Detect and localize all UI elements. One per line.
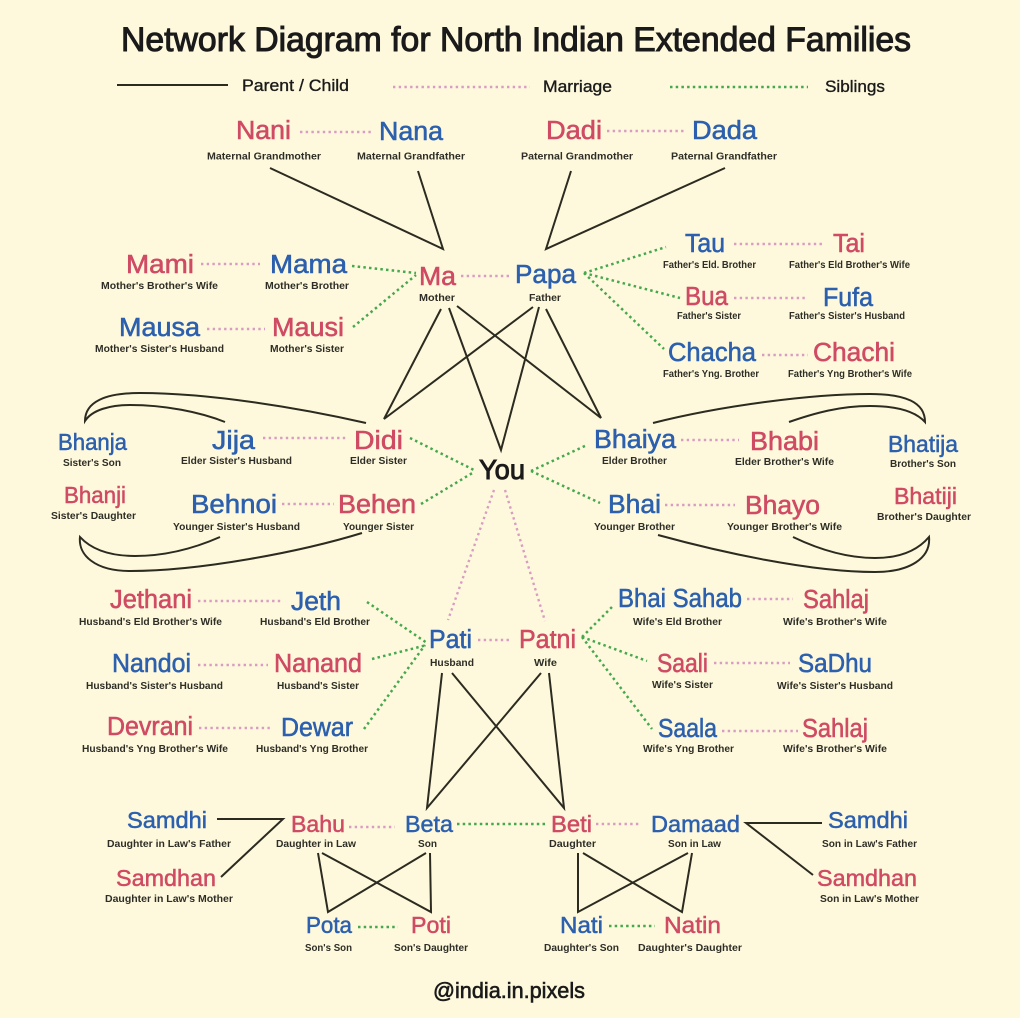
node: Patni [519,626,576,669]
node: Samdhi (left): Samdhi [127,807,207,833]
node: Bhayo: Younger Brother's Wife [727,521,842,533]
legend [117,77,885,96]
node: Sahlaj: Sahlaj [803,586,869,614]
node: Pota: Pota [306,912,352,938]
node: Pati [429,626,474,669]
node: Bhanji [51,482,136,522]
node: Ma: Ma [419,263,457,291]
node: Nandoi: Nandoi [112,650,191,678]
node: Behen: Behen [338,491,416,519]
node: Nanand: Nanand [274,650,362,678]
node: Chacha: Father's Yng. Brother [663,368,759,380]
node: Samdhan (left): Daughter in Law's Mother [105,893,233,905]
node: Bhatiji [877,483,971,523]
node: Papa: Father [529,292,561,304]
node: Samdhi (right): Samdhi [828,807,908,833]
node: Sahlaj (second): Wife's Brother's Wife [783,743,887,755]
node: Beta: Son [418,838,437,850]
node: Saali [652,650,713,691]
node: Bhabi: Bhabi [750,428,819,456]
node: Sahlaj: Wife's Brother's Wife [783,616,887,628]
node: Tau [663,230,756,271]
node: Nani [207,117,321,162]
node: Tai: Tai [833,230,865,258]
node: Chachi [788,339,912,380]
node: Saala [643,715,734,755]
node: Tau: Tau [685,230,725,258]
node: Fufa: Father's Sister's Husband [789,310,905,322]
node: SaDhu: Wife's Sister's Husband [777,680,893,692]
node: Behnoi: Younger Sister's Husband [173,521,300,533]
node: Mausa [95,314,224,355]
node: Bhatiji: Brother's Daughter [877,511,971,523]
node: Mausi: Mother's Sister [270,343,344,355]
node: Samdhan (right): Samdhan [817,865,917,891]
node: Natin: Daughter's Daughter [638,942,742,954]
node: Nati: Daughter's Son [544,942,619,954]
node: Mausa: Mausa [119,314,201,342]
node: Pota [305,912,352,954]
node: Bhaiya: Elder Brother [602,455,667,467]
node: Chacha [663,339,759,380]
node: Devrani [82,713,228,755]
node: Jethani [79,586,222,628]
node: Chachi: Chachi [813,339,895,367]
node: SaDhu: SaDhu [798,650,872,678]
node: Dewar: Dewar [281,714,353,742]
node: Poti [394,912,468,954]
node: Bhanja [58,429,127,469]
node: Devrani: Husband's Yng Brother's Wife [82,743,228,755]
node: Bhai: Bhai [608,491,661,519]
node: Poti: Son's Daughter [394,942,468,954]
node: Nati [544,912,619,954]
node: Bua: Bua [685,283,729,311]
node: Poti: Poti [411,912,451,938]
node: Behen: Younger Sister [343,521,414,533]
node: Jija: Elder Sister's Husband [181,455,292,467]
node: Jeth: Husband's Eld Brother [260,616,370,628]
node: Dada [671,117,777,162]
node: Bhayo: Bhayo [745,492,820,520]
node: Jeth [260,588,370,628]
node: Tai: Father's Eld Brother's Wife [789,259,910,271]
node: Nana [357,118,465,162]
node: Fufa: Fufa [823,284,874,312]
node: Nani: Nani [236,117,291,145]
legend: Marriage [543,78,612,96]
node: Damaad [651,811,740,850]
node: Damaad: Son in Law [668,838,722,850]
node: Bua: Father's Sister [677,310,741,322]
node: Samdhi (left): Daughter in Law's Father [107,838,231,850]
node: Dadi: Paternal Grandmother [521,150,633,162]
node: Bhatija [888,431,958,470]
node: Beta: Beta [405,811,453,837]
node: Bhanji: Bhanji [64,482,126,508]
node: Nana: Nana [379,118,444,146]
node: Dewar: Husband's Yng Brother [256,743,368,755]
node: Mama [265,251,349,292]
marriage dotted lines [198,131,823,827]
node: Bhanja: Sister's Son [63,457,121,469]
node: Bhaiya [594,426,677,467]
node: Bhaiya: Bhaiya [594,426,677,454]
node: Dadi [521,117,633,162]
node: Saali: Saali [657,650,708,678]
node: Mami [101,251,218,292]
node: Pati: Pati [429,626,472,654]
node: Jija [181,427,292,467]
node: Bhabi: Elder Brother's Wife [735,456,834,468]
node: Mausa: Mother's Sister's Husband [95,343,224,355]
node: Bhai Sahab [618,585,742,628]
node: Nati: Nati [560,912,603,938]
node: Pota: Son's Son [305,942,352,954]
node: Bhatiji: Bhatiji [894,483,957,509]
node: Beta [405,811,453,850]
node: Bhai Sahab: Wife's Eld Brother [633,616,722,628]
node: Nanand: Husband's Sister [277,680,359,692]
node: Samdhi (left) [107,807,231,850]
node: Mami: Mami [126,251,194,279]
node: Jethani: Husband's Eld Brother's Wife [79,616,222,628]
node: SaDhu [777,650,893,692]
node: Fufa [789,284,905,322]
curved lines to nieces and nephews [80,393,929,572]
node: Jethani: Jethani [110,586,192,614]
node: Damaad: Damaad [651,811,740,837]
credit handle: @india.in.pixels [433,978,585,1003]
node: Sahlaj (second) [783,715,887,755]
node: Nandoi [86,650,223,692]
node: Bhatija: Brother's Son [890,458,956,470]
node: Papa: Papa [515,261,577,289]
node: Didi: Didi [354,427,403,455]
node: Behnoi [173,491,300,533]
node: Tau: Father's Eld. Brother [663,259,756,271]
node: Mausi [270,314,344,355]
node: Jija: Jija [212,427,256,455]
legend: Parent / Child [242,77,349,95]
node: Saala: Saala [658,715,718,743]
node: Nanand [274,650,362,692]
node: Dewar [256,714,368,755]
node: Samdhi (right) [822,807,917,850]
node: Ma [419,263,457,304]
node: Bhanja: Bhanja [58,429,127,455]
node: Tai [789,230,910,271]
node: Beti: Daughter [549,838,596,850]
node: Dada: Dada [692,117,758,145]
node: Jeth: Jeth [291,588,341,616]
node: Beti: Beti [551,811,592,837]
node: Saali: Wife's Sister [652,679,713,691]
node: Nandoi: Husband's Sister's Husband [86,680,223,692]
title: Network Diagram for North Indian Extended Families [121,21,911,59]
node: Bhayo [727,492,842,533]
node: Bhanji: Sister's Daughter [51,510,136,522]
node: Bhai [594,491,675,533]
node: Behen [338,491,416,533]
node: Samdhan (right) [817,865,919,905]
node: Behnoi: Behnoi [191,491,277,519]
node: Bhabi [735,428,834,468]
node: Bhatija: Bhatija [888,431,958,457]
node: Mama: Mother's Brother [265,280,349,292]
node: Pati: Husband [430,657,474,669]
node: Nana: Maternal Grandfather [357,150,465,162]
node: Bahu [276,811,357,850]
node: Didi [350,427,407,467]
node: Devrani: Devrani [107,713,193,741]
node: Patni: Patni [519,626,576,654]
node: Natin [638,912,742,954]
node: Samdhan (left) [105,865,233,905]
node: Mami: Mother's Brother's Wife [101,280,218,292]
node: Samdhan (left): Samdhan [116,865,216,891]
node: Didi: Elder Sister [350,455,407,467]
node: Bhai: Younger Brother [594,521,675,533]
node: Bua [677,283,741,322]
node: Dadi: Dadi [546,117,602,145]
legend: Siblings [825,78,885,96]
node: Mausi: Mausi [272,314,344,342]
node: Chachi: Father's Yng Brother's Wife [788,368,912,380]
node: Ma: Mother [419,292,455,304]
node: Bhai Sahab: Bhai Sahab [618,585,742,613]
node: Mama: Mama [270,251,348,279]
node: Saala: Wife's Yng Brother [643,743,734,755]
node: Beti [549,811,596,850]
node: Natin: Natin [664,912,721,938]
parent/child lines [217,168,822,912]
node: Sahlaj (second): Sahlaj [802,715,868,743]
node: Papa [515,261,577,304]
node: Dada: Paternal Grandfather [671,150,777,162]
node: Bahu: Daughter in Law [276,838,357,850]
node: Chacha: Chacha [668,339,757,367]
sibling dotted lines [352,247,680,927]
node: Nani: Maternal Grandmother [207,150,321,162]
node: Patni: Wife [534,657,557,669]
node: Samdhan (right): Son in Law's Mother [820,893,919,905]
node: You: You [479,454,525,485]
node: Bahu: Bahu [291,811,345,837]
node: Sahlaj [783,586,887,628]
node: Samdhi (right): Son in Law's Father [822,838,917,850]
